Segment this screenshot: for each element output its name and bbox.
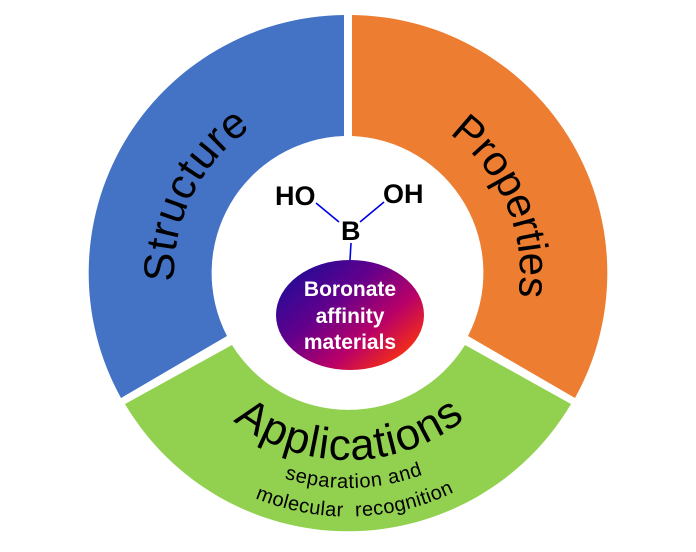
- text: molecular recognition: molecular recognition: [256, 484, 453, 516]
- icon: boronic acid structure: [275, 179, 424, 260]
- label: HO: HO: [275, 181, 316, 211]
- label: B: B: [341, 216, 360, 246]
- text: separation and: separation and: [286, 461, 422, 489]
- bonds: [316, 202, 384, 260]
- heading: Structure: Structure: [144, 114, 246, 280]
- panel: Properties segment: [352, 15, 608, 398]
- heading: Applications: Applications: [233, 402, 462, 460]
- panel: Applications segment: [125, 345, 571, 532]
- callout: Boronate affinity materials: affinity: [316, 305, 385, 328]
- callout: Boronate affinity materials: materials: [304, 331, 396, 354]
- callout: Boronate affinity materials: Boronate: [304, 278, 396, 301]
- heading: Properties: Properties: [452, 114, 549, 296]
- label: OH: OH: [383, 179, 424, 209]
- callout: Boronate affinity materials: [276, 260, 424, 370]
- panel: Structure segment: [88, 15, 344, 398]
